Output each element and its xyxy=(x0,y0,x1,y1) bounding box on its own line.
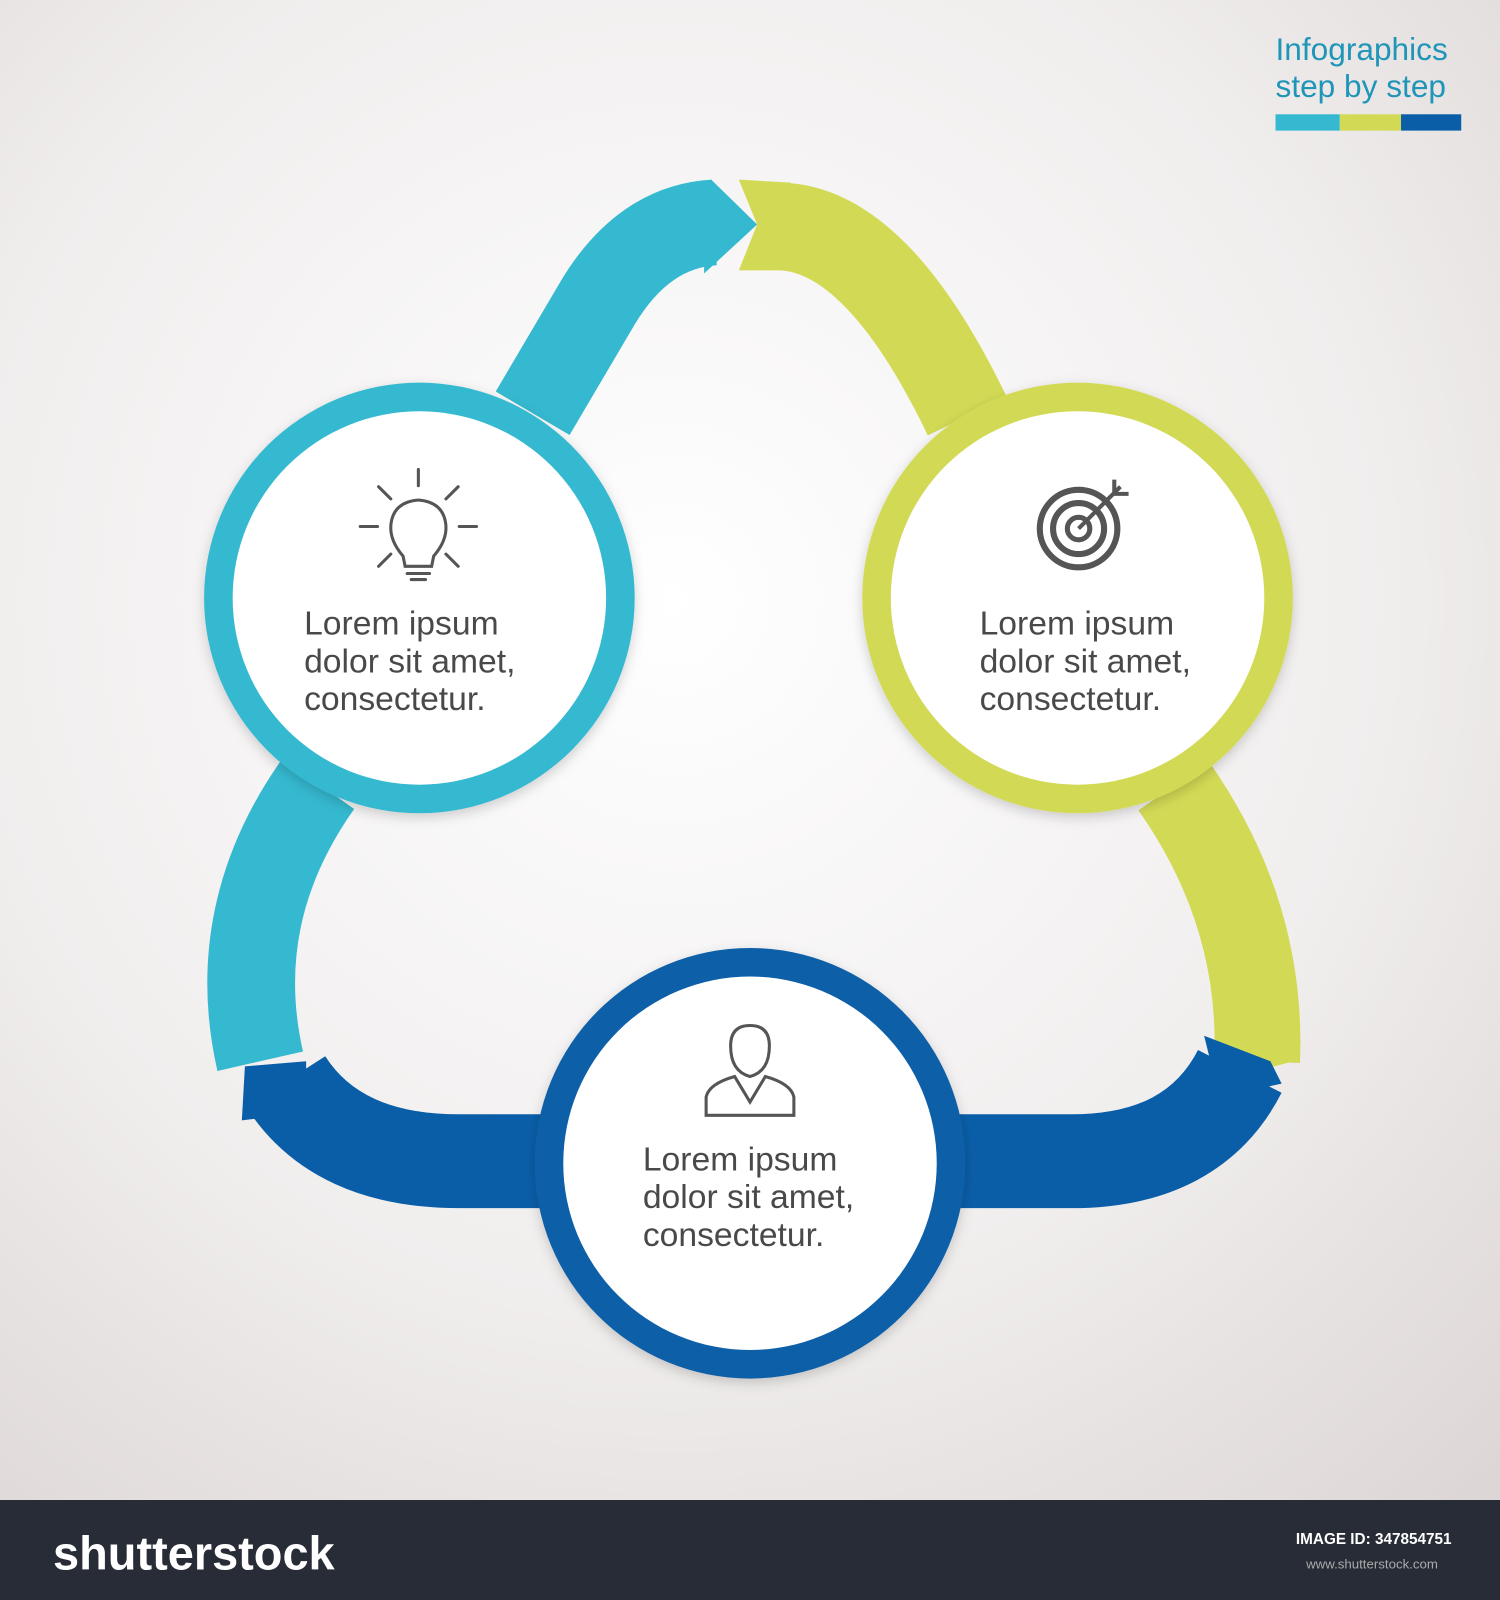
circle: step 1 (cyan) xyxy=(204,383,635,813)
text: step 2: consectetur. xyxy=(980,681,1161,718)
band: green top arrow xyxy=(739,180,967,416)
footer bar: IMAGE ID: 347854751 xyxy=(1296,1531,1452,1548)
text: step 1: dolor sit amet, xyxy=(304,643,515,680)
circle: step 3 (blue) xyxy=(535,948,965,1379)
title: Infographics xyxy=(1276,31,1448,67)
text: step 3: dolor sit amet, xyxy=(643,1179,854,1216)
footer bar: www.shutterstock.com xyxy=(1305,1556,1438,1571)
footer bar xyxy=(0,1500,1500,1600)
band: blue bottom arrow xyxy=(242,1036,1282,1161)
footer bar: shutterstock xyxy=(53,1527,336,1579)
icon: target xyxy=(1040,480,1129,567)
band: cyan left arrow xyxy=(251,784,318,1061)
icon: lightbulb xyxy=(360,469,477,580)
text: step 2: dolor sit amet, xyxy=(980,643,1191,680)
band: green right arrow xyxy=(1173,786,1301,1077)
text: step 3: Lorem ipsum xyxy=(643,1141,837,1178)
text: step 2: Lorem ipsum xyxy=(980,606,1174,643)
text: step 1: consectetur. xyxy=(304,681,486,718)
text: step 3: consectetur. xyxy=(643,1217,824,1254)
title: step by step xyxy=(1276,68,1446,104)
title xyxy=(1276,31,1461,131)
band: cyan top arrow xyxy=(533,181,757,413)
text: step 1: Lorem ipsum xyxy=(304,606,499,643)
icon: person xyxy=(706,1026,794,1115)
circle: step 2 (green) xyxy=(862,383,1293,813)
